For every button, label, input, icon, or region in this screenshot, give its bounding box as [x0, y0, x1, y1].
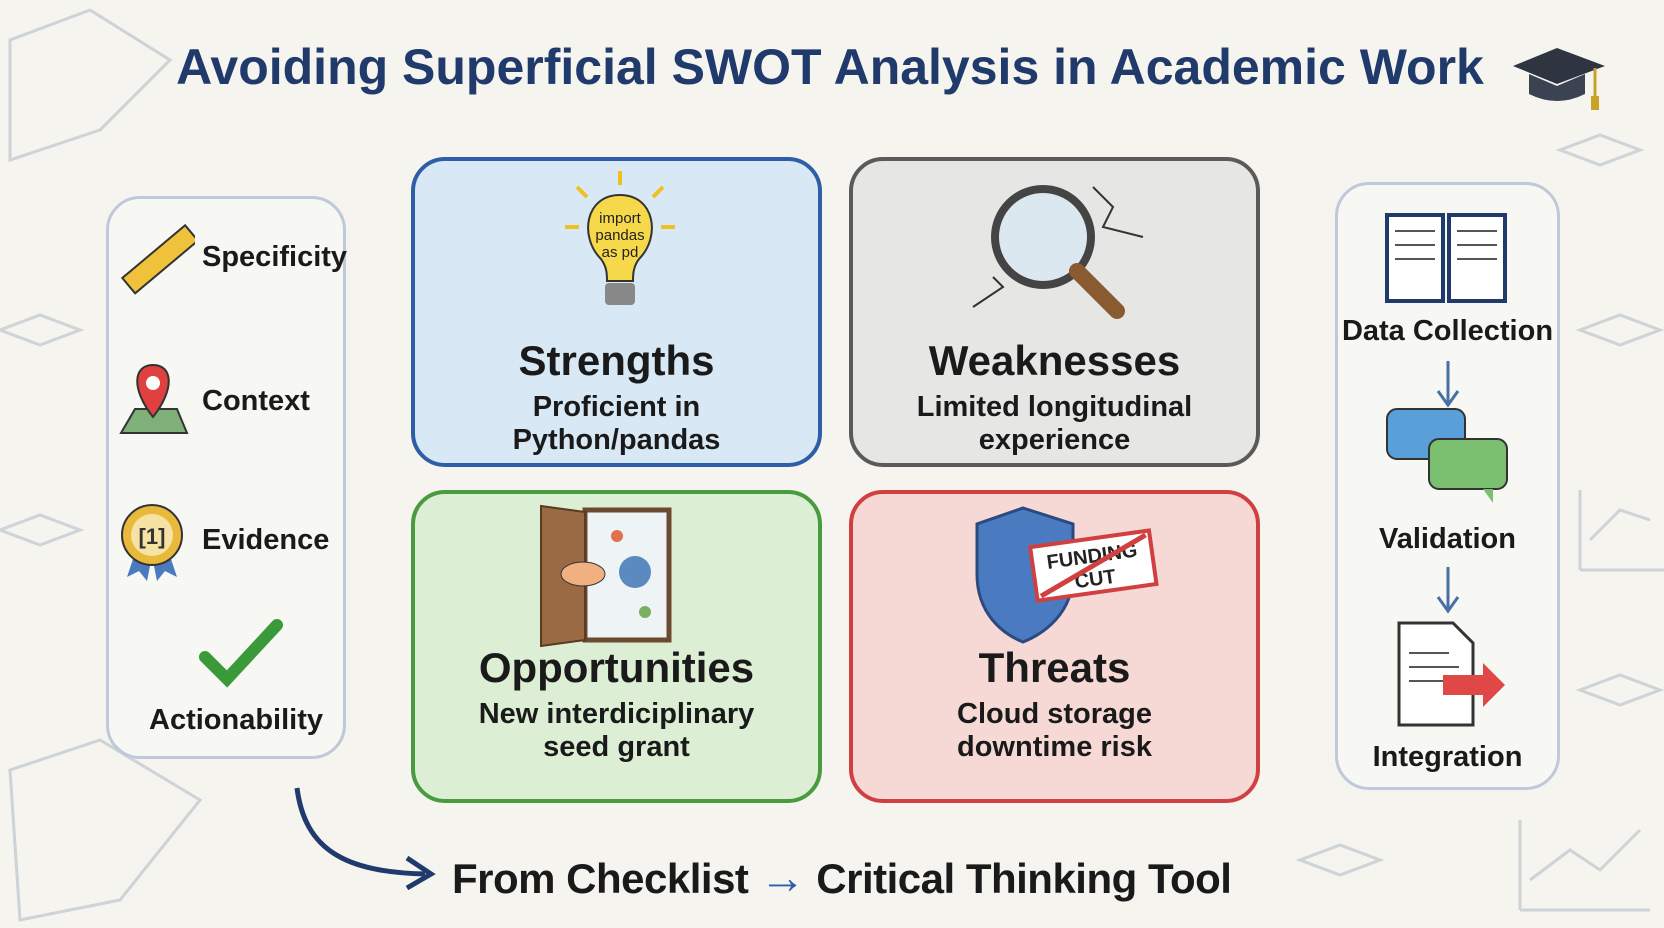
label: Evidence: Evidence	[202, 524, 329, 556]
icon: graduation cap	[1513, 48, 1605, 110]
icon: light bulb	[565, 171, 675, 305]
icon: shield with funding cut sign: CUT	[1073, 566, 1117, 593]
text: opportunities detail: New interdiciplinary	[479, 698, 754, 730]
icon: light bulb: as pd	[602, 244, 638, 261]
icon: light bulb: pandas	[595, 227, 645, 244]
arrow down	[1436, 361, 1460, 408]
text: opportunities detail	[479, 698, 754, 763]
label: Integration: Integration	[1373, 741, 1522, 773]
text: opportunities detail: seed grant	[543, 731, 690, 763]
text: threats detail: Cloud storage	[957, 698, 1152, 730]
text: threats detail	[957, 698, 1152, 763]
text: weaknesses detail: experience	[979, 424, 1130, 456]
icon: door with handshake	[540, 504, 672, 647]
icon: speech bubbles	[1386, 408, 1508, 503]
text: threats detail: downtime risk	[957, 731, 1152, 763]
text: weaknesses detail: Limited longitudinal	[917, 391, 1192, 423]
arrow: curved	[294, 788, 436, 890]
icon: shield with funding cut sign	[976, 506, 1159, 644]
arrow down	[1436, 567, 1460, 614]
icon: shield with funding cut sign: FUNDING	[1045, 539, 1139, 574]
footer text: From Checklist → Critical Thinking Tool	[452, 851, 1231, 903]
text: weaknesses detail	[917, 391, 1192, 456]
text: strengths detail	[513, 391, 720, 456]
label: Data Collection: Data Collection	[1342, 315, 1553, 347]
label: Context: Context	[202, 385, 310, 417]
icon: document with arrow	[1398, 622, 1505, 726]
heading: Opportunities: Opportunities	[479, 644, 754, 691]
icon: open book	[1385, 213, 1507, 303]
icon: badge: [1]	[139, 524, 165, 549]
heading: Weaknesses: Weaknesses	[929, 337, 1180, 384]
icon: magnifier with cracks	[972, 185, 1144, 319]
text: strengths detail: Python/pandas	[513, 424, 720, 456]
title: Avoiding Superficial SWOT Analysis in Academic Work	[176, 39, 1484, 95]
panel: opportunities	[411, 490, 822, 803]
panel: strengths	[411, 157, 822, 467]
text: strengths detail: Proficient in	[533, 391, 700, 423]
icon: map pin	[119, 364, 188, 434]
panel: threats	[849, 490, 1260, 803]
heading: Strengths: Strengths	[518, 337, 714, 384]
panel: process flow	[1335, 182, 1560, 790]
label: Specificity: Specificity	[202, 241, 347, 273]
label: Validation: Validation	[1379, 523, 1516, 555]
panel: checklist criteria	[106, 196, 346, 759]
heading: Threats: Threats	[979, 644, 1130, 691]
icon: badge	[121, 504, 183, 581]
label: Actionability: Actionability	[149, 704, 323, 736]
icon: light bulb: import	[599, 210, 642, 227]
panel: weaknesses	[849, 157, 1260, 467]
icon: check mark	[199, 619, 283, 688]
icon: ruler	[120, 224, 195, 295]
